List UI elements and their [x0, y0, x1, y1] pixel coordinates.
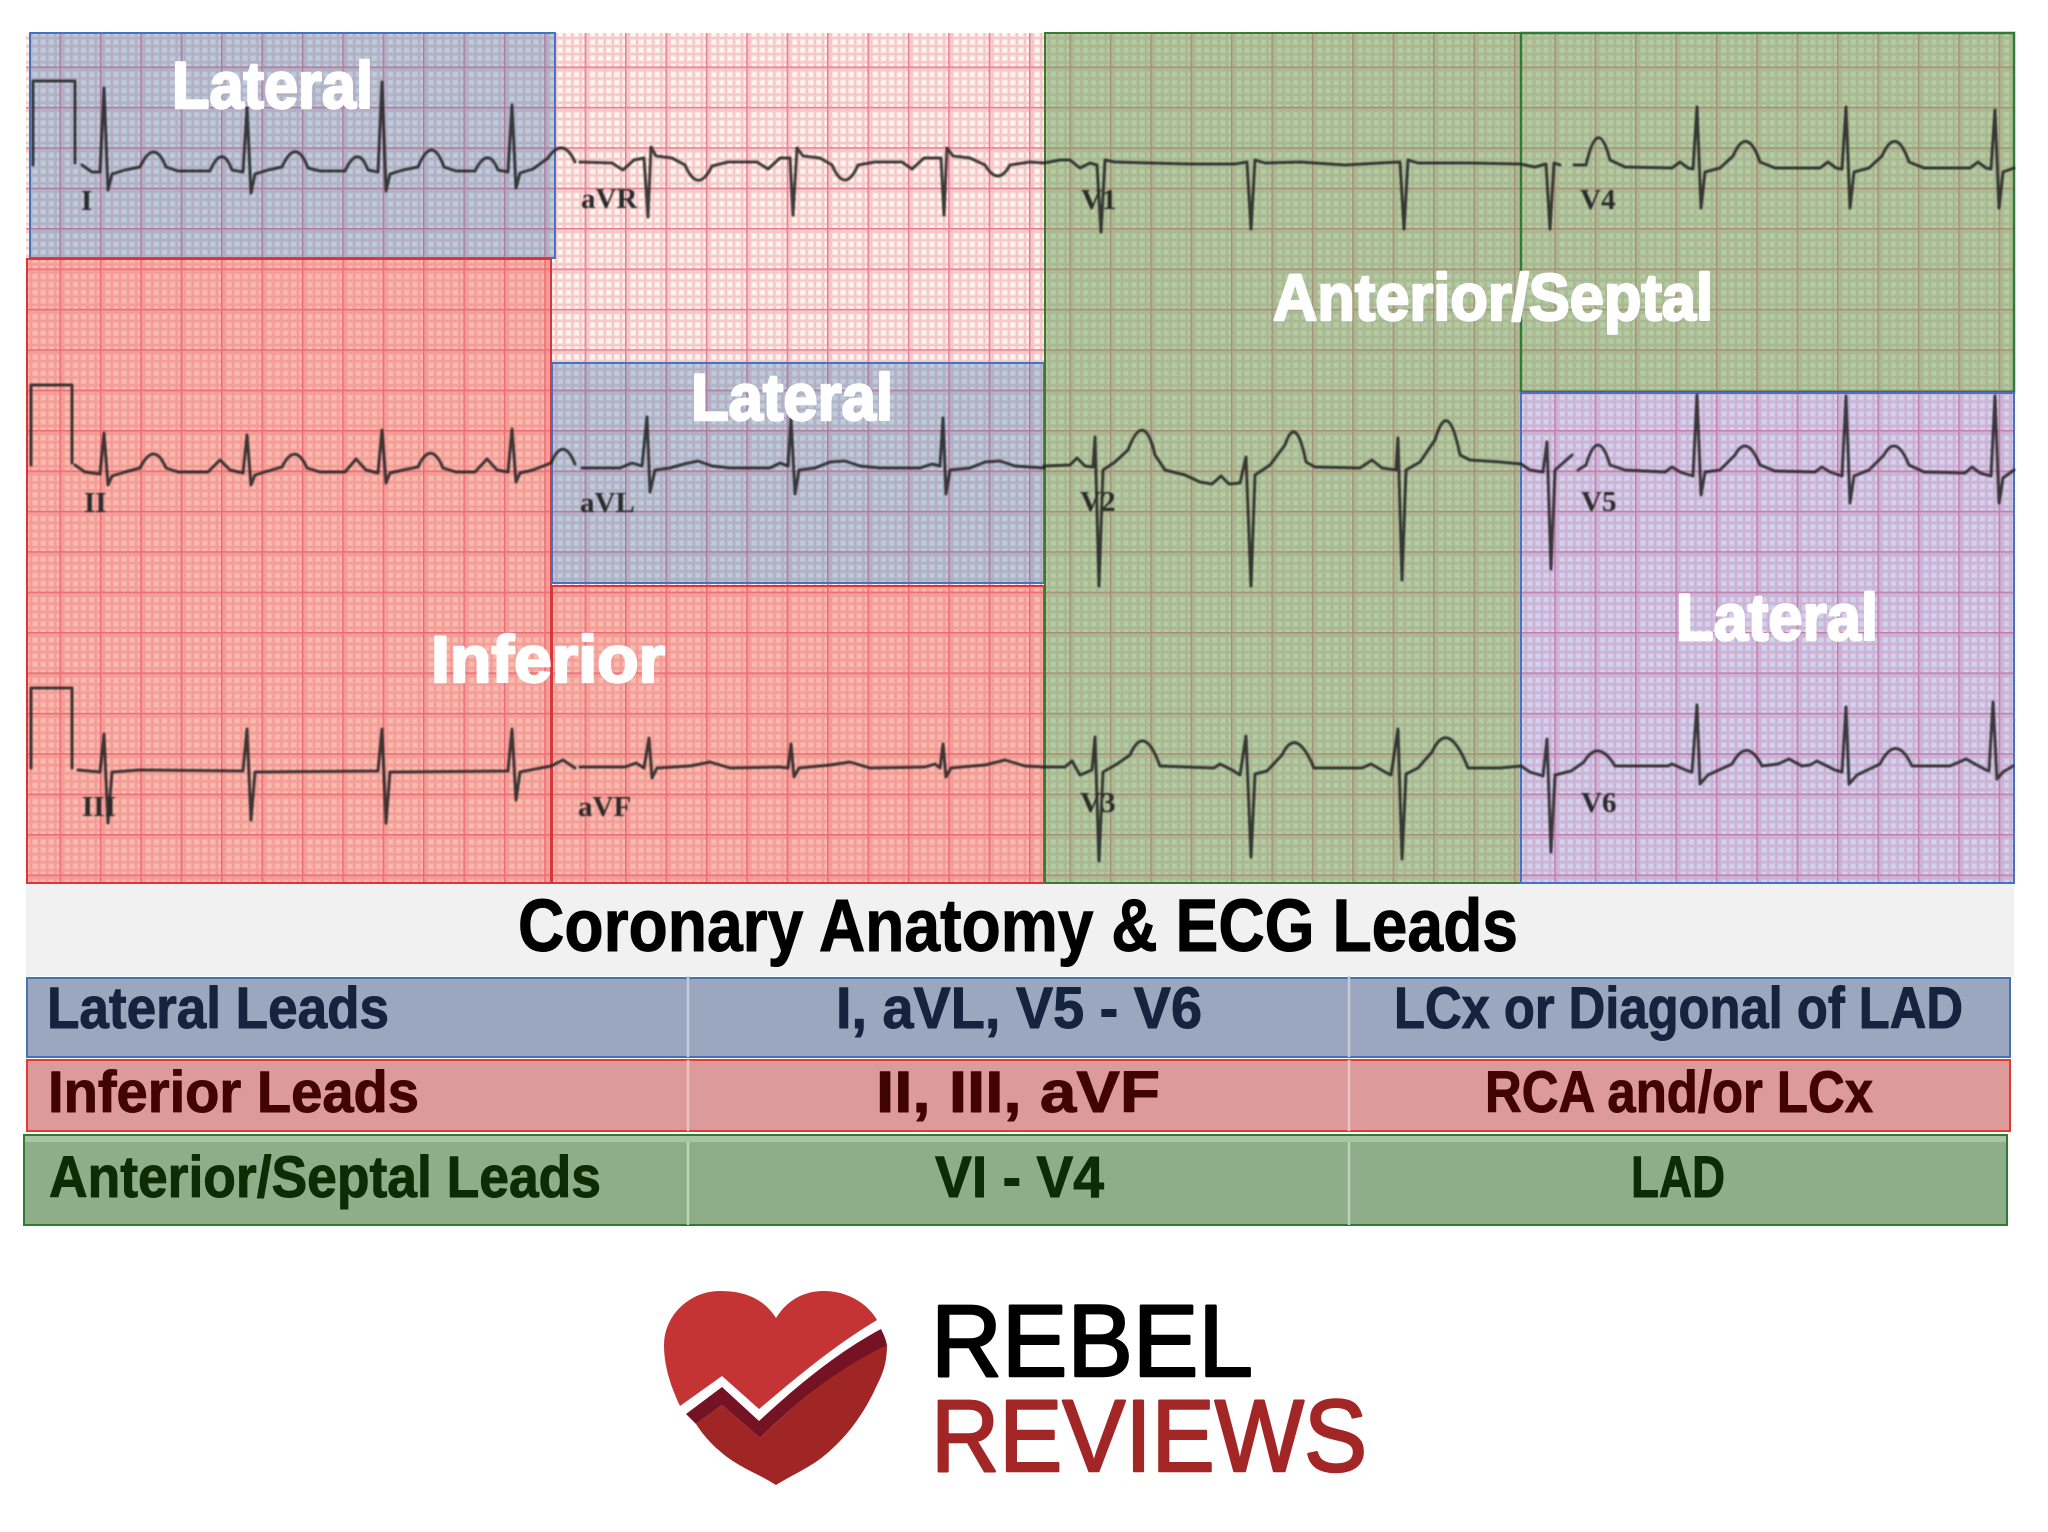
table row: lateral leads: I, aVL, V5 - V6: [836, 976, 1202, 1041]
panel: lateral lead aVL: [552, 363, 1044, 583]
table row: anterior septal leads: Anterior/Septal Leads: [49, 1145, 601, 1210]
lead V2 trace: [1044, 421, 1521, 586]
panel: lateral leads V5 and V6: [1521, 393, 2014, 883]
overlay label: lateral centre: Lateral: [691, 360, 893, 434]
lead I trace: I: [81, 185, 92, 217]
table row: lateral leads: Lateral Leads: [47, 976, 389, 1041]
overlay label: lateral right: Lateral: [1676, 580, 1878, 654]
ECG traces: [31, 81, 2014, 861]
lead V4 trace: V4: [1580, 184, 1615, 216]
logo: heart icon: [664, 1291, 887, 1485]
panel: inferior leads II and III: [27, 259, 551, 883]
panel: lateral lead I: [30, 33, 555, 258]
table row: inferior leads: II, III, aVF: [876, 1060, 1160, 1125]
table row: lateral leads: LCx or Diagonal of LAD: [1394, 976, 1963, 1041]
logo: REBEL wordmark: REBEL: [931, 1284, 1253, 1398]
lead aVL trace: [580, 417, 1044, 519]
lead V5 trace: V5: [1581, 486, 1616, 518]
lead aVL trace: aVL: [580, 487, 635, 519]
table row: anterior septal leads: VI - V4: [935, 1145, 1104, 1210]
table row: anterior septal leads: [24, 1135, 2007, 1225]
overlay label: anterior septal: Anterior/Septal: [1273, 260, 1713, 334]
lead aVF trace: [578, 738, 1044, 823]
lead aVF trace: aVF: [578, 791, 631, 823]
table row: inferior leads: Inferior Leads: [48, 1060, 419, 1125]
title band: [26, 884, 2014, 976]
lead II trace: II: [84, 487, 107, 519]
lead aVR trace: [580, 147, 1044, 217]
overlay label: inferior: Inferior: [431, 622, 665, 696]
lead V1 trace: [1044, 160, 1560, 232]
lead V3 trace: V3: [1080, 787, 1115, 819]
lead V5 trace: [1521, 395, 2014, 569]
lead II trace: [31, 385, 575, 519]
ECG paper background: [26, 33, 2014, 883]
table row: inferior leads: [27, 1060, 2010, 1131]
overlay label: lateral top left: Lateral: [172, 48, 373, 122]
lead V6 trace: V6: [1581, 787, 1616, 819]
lead III trace: [31, 688, 575, 823]
lead V2 trace: V2: [1080, 486, 1115, 518]
lead V4 trace: [1574, 107, 2014, 216]
table row: inferior leads: RCA and/or LCx: [1485, 1060, 1873, 1125]
lead V6 trace: [1521, 702, 2013, 852]
lead V3 trace: [1044, 729, 1521, 861]
lead III trace: III: [82, 791, 116, 823]
panel: anterior septal lead V4: [1521, 33, 2014, 392]
lead aVR trace: aVR: [581, 183, 638, 215]
panel: inferior lead aVF: [552, 586, 1044, 883]
logo: REVIEWS wordmark: REVIEWS: [931, 1379, 1367, 1493]
table row: lateral leads: [27, 976, 2010, 1057]
panel: anterior septal leads V1 to V3: [1045, 33, 1521, 883]
lead I trace: [33, 81, 575, 217]
title: Coronary Anatomy & ECG Leads: [518, 884, 1518, 967]
table row: anterior septal leads: LAD: [1631, 1145, 1725, 1210]
lead V1 trace: V1: [1081, 184, 1116, 216]
